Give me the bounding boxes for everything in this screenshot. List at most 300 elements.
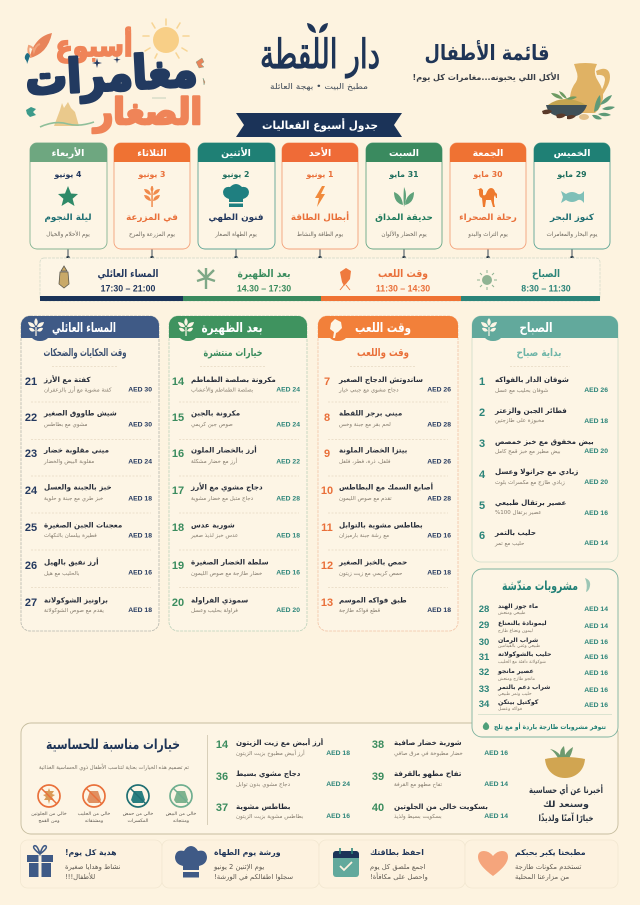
day card: Friday: يوم التراث والبدو [467,232,508,238]
item 37: 37 [216,802,228,814]
footer card: daily gift: هدية كل يوم! [65,848,117,857]
item 1: شوفان بحليب مع عسل [495,388,549,394]
day card: Sunday: الأحد [309,147,331,159]
item 28: ماء جوز الهند [498,603,538,610]
day card: Tuesday [114,143,190,249]
panel header [318,316,458,341]
item 8: 8 [324,412,330,424]
day card: Monday [198,143,275,249]
icon: sandcastle [26,102,94,127]
item 36: دجاج مشوي بسيط [236,769,301,778]
item 33 [479,684,608,697]
item 18: 18 [172,522,184,534]
day card: Saturday: السبت [389,148,419,159]
item 10: AED 28 [427,496,451,502]
drinks note: تتوفر مشروبات طازجة باردة أو مع ثلج [494,722,606,731]
icon: brand leaves [307,23,328,33]
ribbon: weekly activities schedule [236,113,402,137]
footer card: our kitchen grows with your love: تستخدم مكونات طازجة [515,863,581,871]
logo word: little ones: الصغار [92,92,202,133]
item 28: طبيعي ومنعش [498,611,526,616]
slot: afternoon: 14.30 – 17:30 [237,284,291,294]
sub heading: خيارات منتشرة [204,347,262,359]
day card: Friday: 30 مايو [472,170,503,179]
item 8: AED 28 [427,422,451,428]
item 34: كوكتيل بيتكن [498,699,539,706]
item 19: خضار طازجة مع صوص الليمون [191,571,262,577]
item 25: 25 [25,522,37,534]
item 11: AED 16 [427,532,451,540]
item 4: 4 [479,469,486,481]
item 22: 22 [25,412,37,424]
item 17: 17 [172,485,184,497]
menu tagline: الأكل اللي يحبونه...مغامرات كل يوم! [412,72,560,83]
allergy heading: خيارات مناسبة للحساسية [46,737,180,753]
item 14 [216,738,350,757]
footer card: daily gift [20,840,162,888]
item 15: AED 24 [276,422,300,428]
item 13: قطع فواكه طازجة [339,607,381,614]
item 14: AED 24 [276,386,300,394]
footer card: chefs workshop [162,840,319,888]
item 23: مقلوبة البيض والخضار [43,459,94,465]
item 9: بيتزا الخضار الملونة [339,446,408,454]
icon: header sprig [178,318,194,336]
panel: afternoon [169,316,307,631]
timeline of times of day [40,258,600,301]
item 14: بصلصة الطماطم والأعشاب [191,386,254,394]
icon: header sprig [28,318,44,336]
item 17: AED 28 [276,496,300,502]
icon: chef hat [223,184,249,207]
item 28 [479,603,608,616]
item 26 [25,558,152,577]
item 9: AED 26 [427,458,451,466]
item 21: كفتة مع الأرز [43,375,91,384]
day card: Sunday: 1 يونيو [306,170,333,179]
item 25: AED 18 [128,532,152,540]
footer card: save your card [319,840,465,888]
item 9: 9 [324,448,330,460]
item 13: 13 [321,597,333,609]
allergy callout: أخبرنا عن أي حساسية [529,784,603,796]
item 38: شوربة خضار صافية [394,738,462,747]
logo word: week: أسبوع [56,27,132,63]
panel title: الصباح [520,321,552,336]
item 33: 33 [479,684,489,695]
icon: free from 3 [78,785,110,824]
item 32: مانجو طازج ومنعش [498,677,536,682]
footer card: our kitchen grows with your love [465,840,618,888]
item 2 [479,406,608,425]
item 21: كفتة مشوية مع أرز بالزعفران [44,386,112,394]
item 18: عدس خبز لذيذ صغير [190,533,238,539]
item 6: AED 14 [584,540,608,547]
item 32: 32 [479,667,489,678]
slot: play time: وقت اللعب [378,268,428,280]
item 34: فواكه وعسل [498,706,522,712]
icon: free from 2: المكسرات [128,818,148,824]
item 14 [172,375,300,394]
sub heading: وقت واللعب [357,347,409,359]
item 27: AED 18 [128,607,152,614]
allergy callout [529,784,603,824]
brand tagline: مطبخ البيت • بهجة العائلة [270,82,368,91]
day card: Thursday: يوم البحار والمغامرات [547,232,598,238]
kids menu title [412,39,560,83]
item 30: AED 16 [584,639,608,646]
item 3: بيض مطير مع خبز قمح كامل [495,448,561,455]
item 24: خبز طري مع جبنة و حلوية [44,496,103,502]
item 14: مكرونة بصلصة الطماطم [191,375,276,384]
logo word: adventures: مغامرات [24,43,199,105]
item 16: 16 [172,448,184,460]
item 4: زبادي مع جرانولا وعسل [495,467,578,476]
item 32: عصير مانجو [497,668,534,675]
sub heading: وقت الحكايات والضحكات [44,347,126,359]
item 3: AED 20 [584,448,608,455]
allergy callout: وسنعد لك [543,800,589,810]
item 22: شيش طاووق الصغير [43,408,117,418]
footer card: save your card: احفظ بطاقتك [370,848,424,857]
icon: bowl [545,746,585,778]
panel title: بعد الظهيرة [202,321,262,336]
slot: morning [477,268,571,294]
day card: Monday: الأثنين [221,147,251,159]
item 26: AED 16 [128,570,152,576]
item 1: شوفان الدار بالفواكه [495,375,569,384]
item 37: بطاطس مشوية بزيت الزيتون [236,814,304,820]
item 33: حليب وتمر طبيعي [498,692,532,697]
day card: Wednesday: الأربعاء [52,147,84,159]
item 1 [479,375,608,394]
icon: sun [143,19,189,58]
item 39: تفاح مطهو بالقرفة [394,769,462,778]
footer card: save your card: اجمع ملصق كل يوم [370,863,426,871]
item 10 [321,482,451,502]
item 38 [372,738,508,757]
item 8 [324,408,451,428]
item 29 [479,620,608,634]
item 19 [172,558,300,577]
item 3: بيض مخفوق مع خبز خمصص [495,437,594,446]
item 40: بسكويت خالي من الجلوتين [394,802,488,811]
panel: allergy friendly options [21,723,618,834]
item 34: AED 16 [584,702,608,709]
item 7: 7 [324,376,330,388]
connectors from days to timeline [66,249,574,260]
item 15: مكرونة بالجبن [191,408,240,418]
item 10: أصابع السمك مع البطاطس [339,482,433,492]
icon: free from 3: خالي من الحليب [78,811,110,817]
item 3: 3 [479,438,485,450]
panel header [21,316,159,341]
item 11: 11 [321,522,333,534]
panel: surprising drinks [472,569,618,737]
item 13 [321,596,451,614]
item 22: AED 30 [128,422,152,428]
item 7 [324,375,451,394]
day card: Thursday: كنوز البحر [549,213,595,223]
item 26: بالحليب مع هيل [44,571,80,577]
item 30 [479,637,608,649]
item 30: طبيعي وغني بالفيتامين [498,644,541,649]
item 4: زبادي طازج مع مكسرات بلوت [495,479,565,486]
icon: drop [483,722,489,730]
item 5 [479,498,608,517]
item 36: 36 [216,771,228,783]
item 5: عصير برتقال 100% [495,510,542,516]
slot: morning: الصباح [532,268,560,280]
panel: family evening [21,316,159,631]
footer card: our kitchen grows with your love: مطبخنا يكبر بحبكم [515,848,586,857]
item 1: 1 [479,376,485,388]
icon: camel [476,188,497,207]
item 30: شراب الرمان [498,637,538,644]
item 15 [172,408,300,428]
icon: free from 1: خالي من البيض [166,811,196,817]
item 37: بطاطس مشوية [236,802,291,811]
icon: header flower [330,319,342,338]
ribbon: weekly activities schedule: جدول أسبوع الفعاليات [262,118,378,132]
item 7: دجاج مشوي مع جبني خيار [338,388,399,394]
item 31: حليب بالشوكولاتة [498,651,552,658]
item 24: AED 18 [128,496,152,502]
slot: evening [59,266,158,294]
item 19: AED 16 [276,570,300,576]
item 40: AED 14 [484,813,508,820]
item 1: AED 26 [584,387,608,394]
footer card: chefs workshop: يوم الإثنين 2 يونيو [213,863,264,871]
item 22: مشوي مع بطاطس [44,422,88,428]
item 26: أرز نفيق بالهيل [44,558,98,566]
icon: free from 4 [31,785,67,824]
timeline colour bar [40,296,600,301]
day card: Sunday [282,143,358,249]
footer card: chefs workshop: سجلوا اطفالكم في الورشة! [214,873,293,881]
slot: play time [340,268,430,294]
item 18: شوربة عدس [191,520,235,530]
day card: Wednesday: يوم الأحلام والخيال [46,230,90,238]
icon: free from 3: ومشتقاته [85,818,103,824]
item 12: حمص بالخبز الصغير [338,558,407,566]
icon: free from 2 [123,785,153,824]
item 36: دجاج مشوي بدون توابل [236,782,291,788]
sub heading: بداية صباح [516,347,562,359]
item 39 [372,769,508,788]
item 20: فراولة بحليب وعسل [191,608,238,614]
icon: free from 2: خالي من حمض [123,811,153,817]
allergy intro: تم تصميم هذه الخيارات بعناية لتناسب الأطفال ذوي الحساسية الغذائية [39,763,189,771]
item 31: 31 [479,652,490,663]
icon: free from 4: ومن القمح [38,818,60,824]
item 37: AED 16 [326,813,350,820]
footer card: save your card: واحصل على مكافأة! [370,872,428,881]
item 36: AED 24 [326,781,350,788]
item 15: صوص جبن كريمي [191,421,233,428]
item 10: تقدم مع صوص الليمون [339,496,392,502]
day card: Sunday: أبطال الطاقة [291,211,349,223]
item 5: AED 16 [584,510,608,517]
icon: fish [561,191,584,203]
item 4: AED 20 [584,479,608,486]
item 27: براونيز الشوكولاتة [44,596,108,604]
item 11: بطاطس مشوية بالتوابل [339,520,423,530]
footer card: daily gift: نشاط وهدايا صغيرة [65,863,120,871]
item 29: AED 14 [584,623,608,630]
icon: gift [27,846,53,877]
day card: Friday [450,143,526,249]
item 21 [25,375,152,394]
item 39: تفاح مطهو مع القرفة [394,782,443,788]
day card: Tuesday: يوم المزرعة والمرح [129,232,175,238]
item 23: AED 24 [128,458,152,466]
day card: Wednesday: 4 يونيو [54,170,82,179]
item 17: دجاج مشوي مع الأرز [190,482,263,492]
icon: free from 1: ومنتجاته [173,818,189,824]
item 39: AED 14 [484,781,508,788]
icon: wheat [144,186,160,207]
item 28: AED 14 [584,606,608,613]
item 32: AED 16 [584,670,608,677]
item 11: مع رشة جبنة بارميزان [339,533,389,539]
item 31: شوكولاتة دافئة مع الحليب [498,659,546,665]
item 39: 39 [372,771,384,783]
day card: Thursday: 29 مايو [556,170,587,179]
item 17 [172,482,300,502]
item 36 [216,769,350,788]
panel title: وقت اللعب [355,321,411,336]
item 9: فلفل، ذرة، فطر، فلفل [339,459,391,465]
icon: chef hat [175,846,207,878]
item 14: أرز أبيض مطبوخ بزيت الزيتون [236,749,305,757]
item 20: 20 [172,597,184,609]
day card: Friday: رحلة الصحراء [459,213,517,223]
item 14: أرز أبيض مع زيت الزيتون [236,738,323,747]
item 9 [324,446,451,466]
panel header [472,316,618,341]
item 12: AED 18 [427,570,451,576]
item 24: 24 [25,485,38,497]
icon: free from 1 [166,785,196,824]
item 11 [321,520,451,540]
item 24: خبز بالجبنة والعسل [44,482,112,492]
item 6: حليب بالتمر [494,528,536,537]
item 25: فطيرة بيلسان بالنكهات [44,532,97,539]
item 26: 26 [25,560,37,572]
day card: Thursday: الخميس [554,148,590,159]
item 3 [479,437,608,455]
item 30: 30 [479,637,489,648]
panel: morning [472,316,618,562]
footer card: chefs workshop: ورشة يوم الطهاة [214,848,281,857]
item 25: معجنات الجبن الصغيرة [44,520,122,530]
item 19: 19 [172,560,184,572]
item 31: AED 16 [584,654,608,661]
item 13: AED 18 [427,607,451,614]
item 40: 40 [372,802,384,814]
item 21: AED 30 [128,386,152,394]
item 12: حمص كريمي مع زيت زيتون [339,570,402,577]
item 24 [25,482,152,502]
item 18 [172,520,300,540]
item 31 [479,651,608,665]
panel: play time [318,316,458,631]
allergy callout: خيارًا آمنًا ولذيذًا [538,812,594,824]
slot: morning: 8:30 – 11:30 [521,284,571,294]
item 34 [479,699,608,712]
item 23: 23 [25,448,37,460]
day card: Tuesday: في المزرعة [126,213,178,223]
day card: Thursday [534,143,610,249]
item 7: ساندوتش الدجاج الصغير [338,375,423,384]
day card: Wednesday: ليلة النجوم [44,213,92,223]
item 20: سموذي الفراولة [191,596,248,604]
item 5: عصير برتقال طبيعي [495,498,567,507]
slot: evening: المساء العائلي [98,268,158,280]
item 7: AED 26 [427,386,451,394]
item 14: 14 [216,739,229,751]
item 29: ليمون ونعناع طازج [498,629,533,634]
item 33: شراب دعم بالتمر [497,684,550,691]
item 28: 28 [479,604,489,615]
item 16: أرز بالخضار الملون [191,446,257,454]
logo: kids adventure week [24,19,205,133]
item 34: 34 [479,699,490,710]
item 12: 12 [321,560,333,572]
item 16: أرز مع خضار مشكلة [191,457,238,465]
slot: play time: 11:30 – 14:30 [376,284,430,294]
item 8: لحم بقر مع جبنة وخس [339,422,391,428]
item 10: 10 [321,485,333,497]
panel header [169,316,307,341]
item 4 [479,467,608,486]
item 6: 6 [479,530,485,542]
day card: Tuesday: الثلاثاء [137,148,167,159]
item 40: بسكويت بسيط ولذيذ [394,813,442,820]
item 20: AED 20 [276,607,300,614]
item 13: طبق فواكه الموسم [339,596,407,604]
item 22 [25,408,152,428]
item 27: 27 [25,597,37,609]
item 18: AED 18 [276,532,300,540]
footer card: daily gift: للأطفال!!! [65,872,95,881]
item 2: AED 18 [584,418,608,425]
icon: jug with bowl and leaves [542,63,615,120]
drinks heading with leaf: مشروبات مندّشة [502,578,578,593]
day card: Saturday: حديقة المذاق [375,213,433,223]
day card: Tuesday: 3 يونيو [138,170,165,179]
item 29: ليمونادة بالنعناع [498,620,547,627]
item 40 [372,802,508,820]
icon: palm leaf [25,33,52,64]
slot: evening: 17:30 – 21:00 [101,284,155,294]
item 38: 38 [372,739,384,751]
item 23: ميني مقلوبة خضار [43,446,109,454]
item 32 [479,667,608,682]
item 15: 15 [172,412,184,424]
menu heading: قائمة الأطفال [424,39,550,65]
panel title: المساء العائلي [52,321,116,336]
item 25 [25,520,152,540]
item 2: فطائر الجبن والزعتر [494,406,567,415]
item 8: ميني برجر اللقطة [339,408,402,418]
item 38: خضار مطبوخة في مرق صافي [394,751,463,757]
slot: afternoon [197,268,291,294]
footer card: our kitchen grows with your love: من مزارعنا المحلية [515,873,569,881]
small sparkles [92,56,121,68]
item 2: 2 [479,407,485,419]
